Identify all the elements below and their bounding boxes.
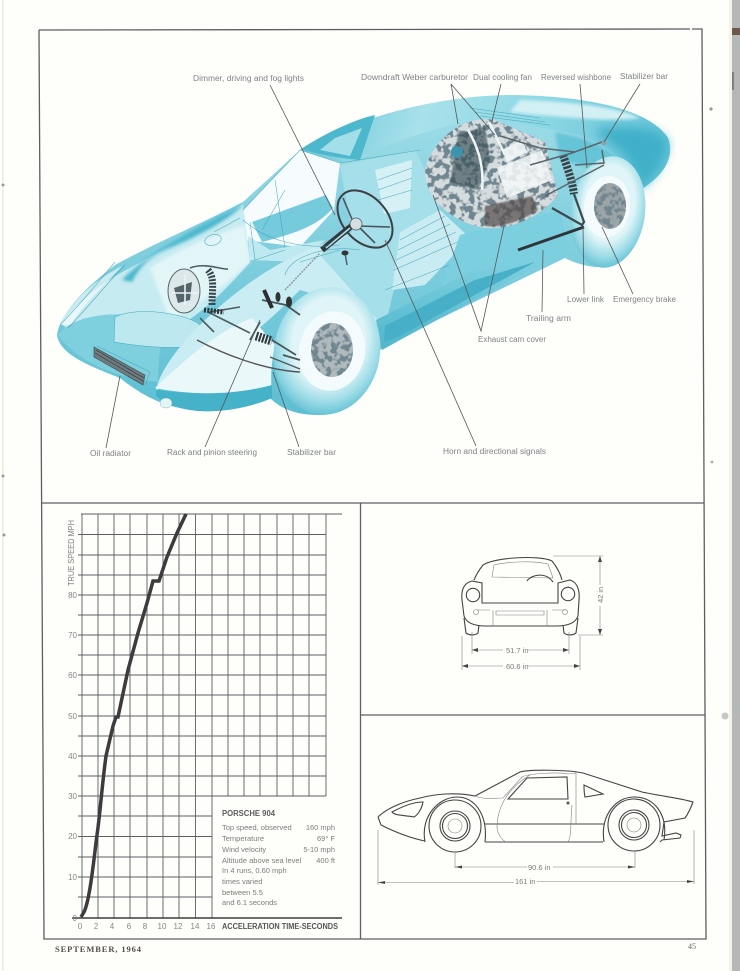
part labels: Stabilizer bar — [620, 72, 668, 81]
fog light — [160, 398, 172, 408]
acceleration chart — [67, 514, 342, 931]
rear wheel side — [608, 799, 660, 851]
x axis labels: 12 — [174, 922, 183, 931]
part labels: Lower link — [567, 295, 605, 304]
y axis labels: 0 — [73, 914, 78, 923]
windshield glass — [243, 150, 340, 247]
x axis labels: 4 — [110, 922, 115, 931]
test data block: In 4 runs, 0.60 mph — [222, 866, 287, 875]
front suspension — [168, 266, 250, 333]
cabin seats and floor — [320, 150, 440, 328]
front view drawing: 51.7 in — [506, 646, 529, 655]
roof front shade — [301, 115, 375, 160]
side view drawing: 161 in — [515, 877, 535, 886]
front wheel side — [429, 800, 481, 852]
seat highlights — [375, 160, 412, 214]
part labels: Exhaust cam cover — [478, 335, 546, 344]
test data block: 5-10 mph — [303, 845, 335, 854]
part labels: Oil radiator — [90, 449, 131, 458]
part labels: Reversed wishbone — [541, 73, 612, 82]
y axis labels: 80 — [68, 591, 78, 600]
hood dark streak — [122, 204, 243, 282]
steering wheel — [322, 180, 403, 265]
front car outline — [462, 558, 579, 626]
part labels: Downdraft Weber carburetor — [361, 73, 468, 82]
test data block: PORSCHE 904 — [222, 809, 276, 818]
test data block: times varied — [222, 877, 262, 886]
side view drawing: 90.6 in — [528, 863, 551, 872]
front view drawing: 60.6 in — [506, 662, 529, 671]
rear body — [440, 210, 570, 300]
part labels: Horn and directional signals — [443, 447, 546, 456]
rear upper vents — [470, 108, 550, 125]
test data block: Altitude above sea level — [222, 856, 302, 865]
y axis labels — [68, 591, 78, 923]
grille — [477, 610, 566, 626]
width dimensions — [462, 556, 603, 670]
front windshield — [492, 562, 553, 578]
test data block: between 5.5 — [222, 888, 263, 897]
x axis title: ACCELERATION TIME-SECONDS — [222, 922, 339, 931]
y axis title: TRUE SPEED MPH — [67, 520, 76, 586]
x axis labels: 16 — [207, 922, 216, 931]
body detail lines — [60, 150, 420, 328]
acceleration curve — [81, 514, 186, 917]
left nose surface — [58, 314, 165, 382]
nose panel — [114, 312, 200, 347]
radiator — [94, 346, 150, 385]
part labels: Stabilizer bar — [287, 448, 336, 457]
front fender white wing — [155, 318, 275, 394]
steering wheel arc — [527, 575, 553, 582]
cutaway car illustration — [57, 95, 670, 423]
door and windows — [475, 773, 576, 842]
x axis labels: 6 — [127, 922, 132, 931]
test data block: 69° F — [317, 834, 335, 843]
x axis labels: 2 — [94, 922, 99, 931]
front tyres — [464, 618, 578, 635]
callout lines — [106, 84, 640, 448]
front view drawing: 42 in — [596, 587, 605, 603]
page number: 45 — [688, 942, 696, 951]
length dimensions — [378, 830, 694, 885]
fender shine — [60, 266, 122, 330]
side car outline — [378, 770, 693, 842]
roof and rear deck — [300, 95, 670, 190]
test data block: 160 mph — [306, 823, 335, 832]
hood — [60, 204, 250, 340]
x axis labels: 14 — [191, 922, 200, 931]
x axis labels: 0 — [78, 922, 83, 931]
y axis labels: 10 — [68, 873, 78, 882]
y axis labels: 70 — [68, 631, 78, 640]
rear fender shade — [596, 127, 668, 190]
part labels: Trailing arm — [526, 314, 571, 323]
test data block — [222, 809, 336, 907]
part labels: Rack and pinion steering — [167, 448, 257, 457]
x axis labels — [78, 922, 216, 931]
test data block: and 6.1 seconds — [222, 898, 277, 907]
headlights — [466, 588, 480, 602]
side wheel arches — [424, 797, 665, 842]
part labels: Dimmer, driving and fog lights — [193, 74, 304, 83]
engine — [425, 119, 558, 228]
dashboard shade — [252, 195, 333, 242]
footer date: SEPTEMBER, 1964 — [55, 944, 142, 954]
x axis labels: 8 — [143, 922, 148, 931]
test data block: Temperature — [222, 834, 264, 843]
part labels: Emergency brake — [613, 295, 677, 304]
y axis labels: 40 — [68, 752, 78, 761]
sill — [376, 258, 552, 350]
grid — [78, 514, 342, 918]
rear suspension — [500, 136, 606, 250]
engine dark masses — [450, 126, 490, 190]
y axis labels: 50 — [68, 712, 78, 721]
part labels — [90, 72, 677, 458]
y axis labels: 20 — [68, 832, 78, 841]
x axis labels: 10 — [158, 922, 167, 931]
y axis labels: 30 — [68, 792, 78, 801]
lower nose blue — [156, 385, 272, 411]
front view drawing — [462, 556, 605, 671]
side view drawing — [378, 770, 694, 886]
cabin floor band — [156, 215, 400, 390]
y axis labels: 60 — [68, 671, 78, 680]
part labels: Dual cooling fan — [473, 73, 532, 82]
hood pale centre — [150, 225, 250, 320]
steering rack — [197, 253, 320, 372]
roof window — [320, 128, 362, 156]
test data block: 400 ft — [316, 856, 336, 865]
rear quarter panel — [555, 132, 640, 190]
front wheel — [264, 279, 390, 423]
x axis — [72, 917, 342, 919]
rear seat lines — [285, 168, 475, 290]
car body silhouette — [57, 95, 670, 415]
test data block: Wind velocity — [222, 845, 266, 854]
rear wheel — [564, 151, 652, 273]
test data block: Top speed, observed — [222, 823, 292, 832]
deck highlight — [510, 100, 640, 120]
